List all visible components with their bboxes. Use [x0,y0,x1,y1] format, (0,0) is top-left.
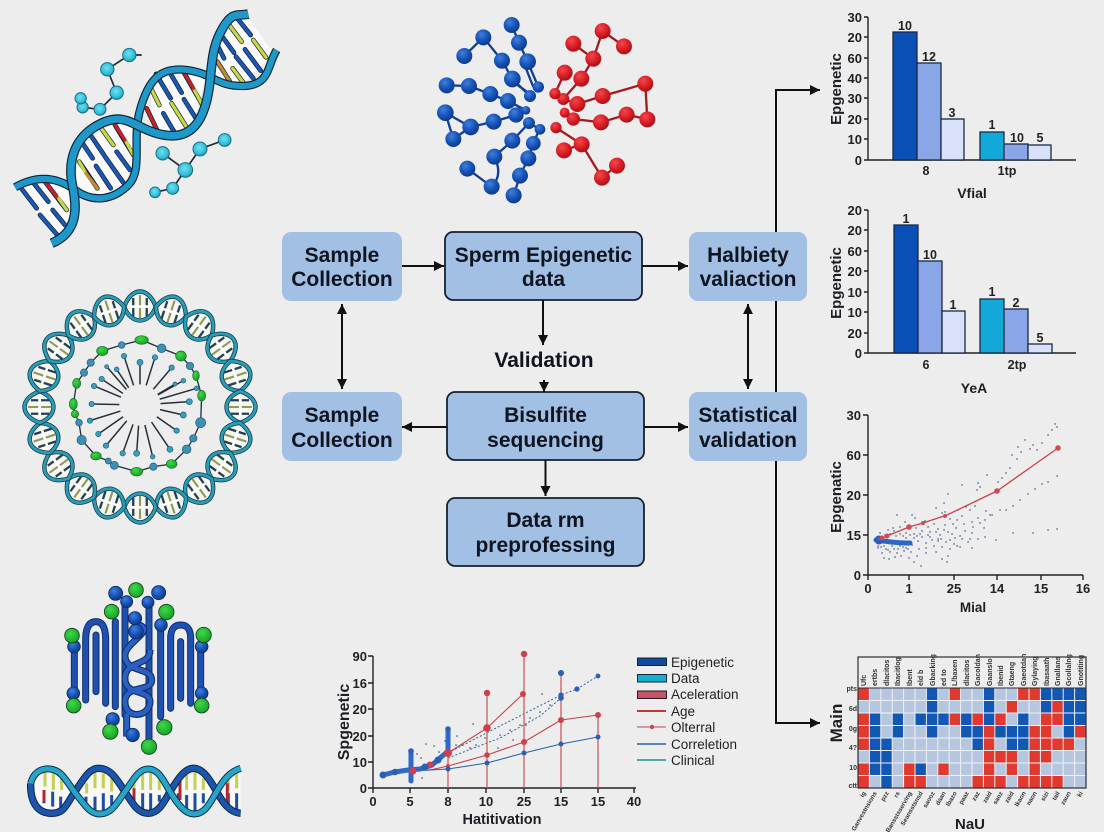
x tick labels: 25 [947,581,961,596]
scatter dots [417,694,550,778]
value labels: 5 [1037,331,1044,345]
arrow: double validation link [747,304,749,389]
x tick labels: 1 [905,581,913,596]
column footer labels: ki [1076,790,1085,798]
molecule chain upper [75,48,142,115]
x tick labels: 15 [1034,581,1048,596]
y axis title: Epgenatic [828,461,845,533]
connector line to right-hand charts [776,90,820,723]
flowchart box: Halbiety valiaction: valiaction [700,268,796,291]
category labels: 2tp [1008,358,1027,372]
value labels: 10 [923,248,937,262]
red trend line [878,448,1058,540]
y tick labels: 20 [847,488,861,503]
icon: blue and red molecule cluster [437,17,655,203]
blue cells [869,688,1086,788]
row labels: 0g [849,726,857,733]
column footer labels: Seansstsnsd [900,790,925,827]
heatmap header divider [858,687,1086,689]
value labels [903,212,1044,345]
heatmap frame [858,657,1086,788]
column header labels: Gacoldan [975,654,982,686]
flowchart box: Data preprofessing: Data rm [506,509,585,532]
y tick labels: 15 [847,528,861,543]
flowchart box: Halbiety valiaction: Halbiety [707,244,789,267]
value labels: 10 [1010,131,1024,145]
x axis title: Mial [960,600,986,615]
blue molecule [437,17,545,203]
x tick labels: 5 [406,794,414,809]
column header labels: Gaeotdan [1021,654,1028,686]
dashed trend lines [448,676,598,758]
flowchart box: Data preprofessing: preprofessing [475,534,616,557]
blue series line [413,737,598,771]
light strand [31,768,241,814]
x tick labels: 14 [990,581,1005,596]
flowchart box: Statistical validation: Statistical [698,404,798,427]
flowchart box: Sample Collection top: Collection [291,268,393,291]
bars [894,225,1052,353]
column footer labels: zaun [1060,790,1073,806]
column header labels: ertbs [872,669,879,686]
value labels: 12 [922,50,936,64]
heatmap y title: Main [827,704,846,742]
flowchart box: Halbiety valiaction [689,232,807,301]
flow arrows between boxes [342,266,748,496]
bar chart axes [864,210,1076,353]
red series lines [413,694,598,771]
y tick labels: 10 [848,285,862,300]
arrow: bisulfite to sample [402,426,447,428]
red cells [858,688,1086,788]
column header labels: Gaanslo [987,658,994,686]
column footer labels [850,790,1085,832]
y tick labels: 20 [353,729,367,744]
helix white interior [17,15,273,240]
value labels: 1 [989,285,996,299]
arrow: sperm data to halbiety [642,265,688,267]
bar chart axes [864,17,1076,160]
flowchart box: Sperm Epigenetic data [445,232,642,300]
column footer labels: pzz [880,790,891,803]
value labels: 1 [950,298,957,312]
outer helix lobes [25,292,255,522]
x tick labels: 0 [369,794,377,809]
horizontal helix white interior [30,768,241,813]
category labels: 8 [923,164,930,178]
column header labels: Ibent [907,669,914,686]
green spheres [65,583,211,754]
y tick labels: 10 [353,755,367,770]
y tick labels: 40 [848,71,862,86]
flowchart box: Sperm Epigenetic data: Sperm Epigenetic [455,244,633,267]
heading: Validation: Validation [494,349,594,372]
strand one [15,50,277,198]
column footer labels: daan [934,790,948,807]
flowchart box: Statistical validation: validation [699,429,797,452]
heatmap [827,654,1086,832]
column header labels: Ibacitlog [895,657,902,686]
brown helix rungs [86,62,230,188]
flowchart box: Sample Collection top [282,232,402,301]
scatter axes [863,415,1083,580]
row labels: 4? [849,745,857,752]
row labels: pts [846,686,857,693]
column footer labels: zaid [1004,790,1016,804]
y tick labels [847,408,861,583]
legend: Olterral: Olterral [671,720,715,735]
arrow: sperm data to validation [542,300,544,345]
arrow: validation to bisulfite [543,380,545,392]
column header labels: Gbacking [930,654,937,686]
heatmap background [858,688,1086,788]
column header labels [861,654,1085,686]
y tick labels: 30 [847,408,861,423]
x tick labels: 0 [864,581,872,596]
column footer labels: zaid [982,790,994,804]
red markers [410,651,601,774]
red molecule [549,23,655,186]
y tick labels: 20 [848,326,862,341]
value labels: 2 [1013,296,1020,310]
column header labels: Gnotiting [1078,655,1085,686]
category labels [923,358,1027,372]
flowchart box: Data preprofessing [447,498,644,566]
icon: circular DNA ring [25,292,255,522]
y tick labels: 0 [854,568,861,583]
legend: Data: Data [671,671,700,686]
row labels: 6d [849,706,857,713]
y axis title: Epgenetic [828,247,845,319]
column header labels: Ibasaath [1044,658,1051,686]
y tick labels: 60 [847,448,861,463]
icon: DNA double helix top left [15,14,277,243]
category labels: 6 [923,358,930,372]
flowchart box: Sample Collection lower [282,392,402,461]
yellow helix rungs [57,22,266,210]
central coil [125,623,152,737]
molecule chain lower [150,134,231,198]
column footer labels: ig [859,790,868,799]
column header labels: Ibenid [998,665,1005,686]
value labels: 1 [989,118,996,132]
blue dense cluster [383,729,448,781]
x tick labels: 10 [479,794,493,809]
x tick labels: 8 [444,794,452,809]
y tick labels: 20 [848,203,862,218]
scatter chart: Epgenatic vs Mial [828,408,1090,615]
bar chart: Vfial [828,10,1076,201]
column footer labels: paaz [958,790,971,806]
protein tubes [74,602,201,740]
y axis title: Epgenetic [828,53,845,125]
y tick labels: 0 [855,153,862,168]
flowchart box: Bisulfite sequencing [447,392,644,460]
column header labels: dlacitos [964,659,971,686]
legend: Epigenetic: Epigenetic [671,655,734,670]
legend [637,655,739,768]
column footer labels: saoz [992,790,1005,806]
x tick labels: 25 [517,794,531,809]
y tick labels: 10 [848,132,862,147]
y tick labels: 60 [848,244,862,259]
category labels [923,164,1017,178]
icon: horizontal DNA helix bottom left [30,768,241,814]
value labels: 5 [1037,131,1044,145]
helix rung outlines [20,18,266,235]
column footer labels: lbazo [945,790,959,808]
column footer labels: sizi [1040,790,1051,803]
value labels: 1 [903,212,910,226]
y tick labels: 90 [353,649,367,664]
blue spheres [67,586,208,742]
column header labels: Gylaying [1032,656,1039,686]
horizontal helix rungs [44,770,237,812]
legend: Correlation: Correletion [671,737,737,752]
column footer labels: zaz [971,790,982,802]
x tick labels: 16 [1076,581,1090,596]
category labels: 1tp [998,164,1017,178]
column header labels: eld b [918,670,925,686]
column footer labels: rs [893,790,902,799]
y tick labels: 20 [848,112,862,127]
y tick labels: 30 [848,10,862,25]
flowchart box: Bisulfite sequencing: sequencing [487,429,604,452]
blue markers [380,670,600,778]
x axis title: YeA [961,380,987,396]
legend: Clinical: Clinical [671,753,715,768]
inner network of nodes and spokes [69,336,206,476]
y tick labels: 60 [848,51,862,66]
arrow: bisulfite to statistical [644,426,688,428]
value labels: 3 [949,106,956,120]
legend: Aceleration: Aceleration [671,687,739,702]
column header labels: Gcollalng [1066,654,1073,686]
bars [893,32,1051,160]
blue cluster head [874,536,884,544]
y tick labels: 20 [353,702,367,717]
y tick labels [353,649,367,796]
y tick labels: 20 [848,30,862,45]
y tick labels [848,203,862,361]
y tick labels: 30 [848,91,862,106]
red helix rungs [45,73,193,197]
arrow: sample to sperm data [402,265,444,267]
blue helix rungs [20,18,261,235]
chart axes [368,656,636,793]
column footer labels: lkaon [1014,790,1028,808]
y tick labels [848,10,862,168]
x axis title: Vfial [957,185,987,201]
column footer labels: naon [1025,790,1039,807]
column header labels: Gnallans [1055,656,1062,686]
y tick labels: 16 [353,676,367,691]
flowchart box: Sperm Epigenetic data: data [522,268,565,291]
bar chart: YeA [828,203,1076,396]
flowchart box: Sample Collection lower: Sample [305,404,379,427]
y tick labels: 20 [848,264,862,279]
dark strand [31,768,241,813]
row labels: ctt [848,783,858,790]
x tick labels: 40 [627,794,641,809]
row labels: 10 [849,765,857,772]
line and scatter chart: Spgenetic vs Hatitivation [336,649,641,828]
x axis title: Hatitivation [463,812,541,828]
column header labels: ed to [941,669,948,686]
column header labels: Ufc [861,675,868,686]
column header labels: Gtaeng [1009,662,1016,686]
x tick labels: 15 [591,794,605,809]
y tick labels: 0 [855,346,862,361]
value labels: 10 [898,19,912,33]
value labels [898,19,1044,145]
column header labels: dlacitos [884,659,891,686]
flowchart box: Sample Collection top: Sample [305,244,379,267]
y tick labels: 10 [848,305,862,320]
x tick labels [864,581,1090,596]
y tick labels: 20 [848,223,862,238]
column footer labels: saooz [922,790,937,809]
x tick labels [369,794,641,809]
flowchart box: Bisulfite sequencing: Bisulfite [504,404,587,427]
column header labels: L/baxen [952,660,959,686]
flowchart box: Statistical validation [689,392,807,461]
icon: blue and green coiled protein [65,583,211,754]
flowchart box: Sample Collection lower: Collection [291,429,393,452]
scatter points [878,424,1057,566]
red trend points [880,445,1061,540]
arrow: double sample link [341,304,343,389]
x tick labels: 15 [554,794,568,809]
strand two [52,14,248,243]
column footer labels: tail [1051,790,1062,802]
column footer labels: Ganvestnsions [850,790,879,832]
legend: Age: Age [671,704,695,719]
arrow: bisulfite to data [544,460,546,496]
row labels [846,686,858,790]
y axis title: Spgenetic [336,684,353,760]
y tick labels: 0 [360,781,367,796]
red vertical drop lines [448,654,598,788]
blue point cluster [876,540,910,543]
